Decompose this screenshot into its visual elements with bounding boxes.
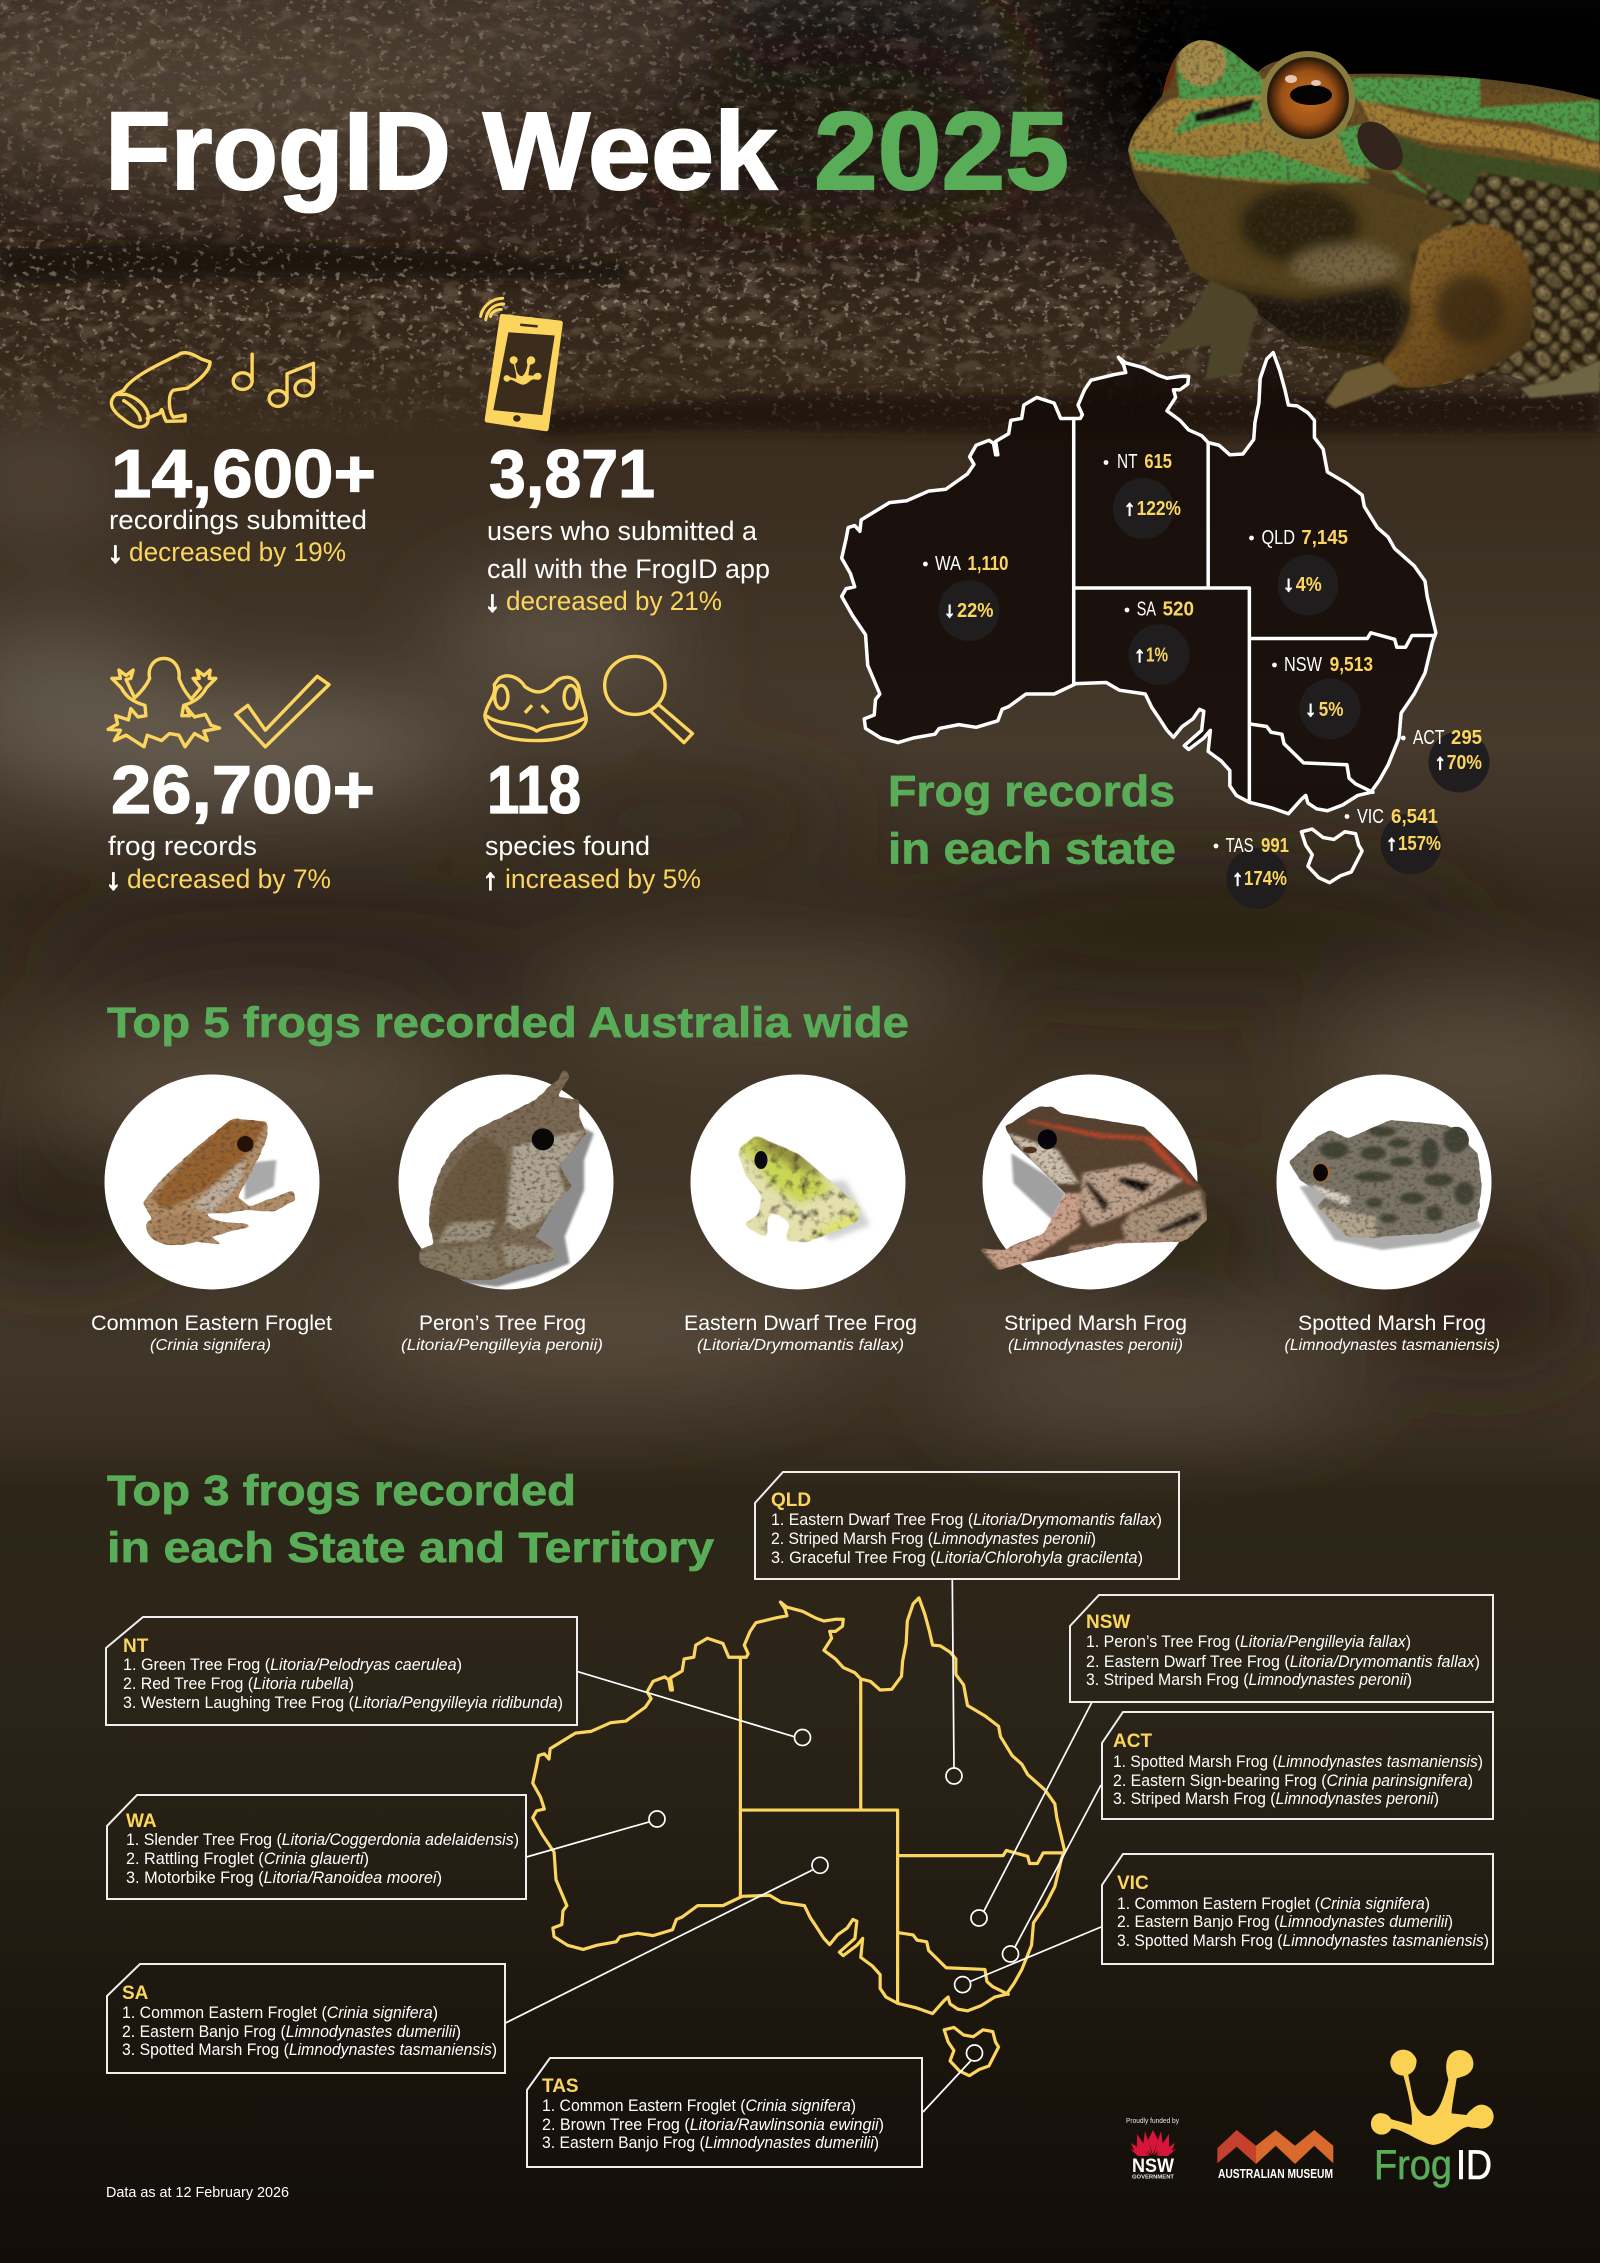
title xyxy=(105,90,1069,213)
stat: recordings submitted: ↓ xyxy=(108,537,123,569)
state label: TAS: TAS xyxy=(1226,835,1254,857)
state label: NSW: ↓ xyxy=(1305,698,1316,721)
callout: NT xyxy=(106,1617,577,1725)
callout: NSW: 3. Striped Marsh Frog (Limnodynastes peronii) xyxy=(1086,1670,1412,1689)
logo: NSW Government xyxy=(1126,2116,1179,2180)
state label: ACT: ACT xyxy=(1413,727,1444,749)
heading: top 3 frogs per state: in each State and Territory xyxy=(107,1524,714,1572)
logo: FrogID: ID xyxy=(1456,2141,1492,2188)
callout: NSW: NSW xyxy=(1086,1612,1130,1633)
state label: NT xyxy=(1104,451,1181,539)
logo: NSW Government: Proudly funded by xyxy=(1126,2116,1179,2125)
stat: species found: ↑ xyxy=(483,864,498,896)
state label: VIC: ↑ xyxy=(1386,832,1397,855)
stat: recordings submitted: decreased by 19% xyxy=(129,537,346,567)
callout: VIC: VIC xyxy=(1117,1873,1149,1894)
state label: WA: ↓ xyxy=(944,599,955,622)
state label: NSW xyxy=(1272,654,1373,740)
title: FrogID xyxy=(105,90,451,213)
frog names: Eastern Dwarf Tree Frog xyxy=(684,1312,917,1335)
logo: Australian Museum: AUSTRALIAN MUSEUM xyxy=(1218,2167,1333,2181)
frog card: Peron's Tree Frog xyxy=(398,1068,614,1290)
map: frog records per state xyxy=(842,353,1490,909)
state label: SA: 520 xyxy=(1163,598,1194,620)
heading: frog records in each state: in each state xyxy=(888,824,1176,874)
state label: NSW: 9,513 xyxy=(1330,654,1373,676)
callout: SA xyxy=(107,1964,505,2073)
logo: Australian Museum xyxy=(1217,2130,1333,2181)
stat: frog records: decreased by 7% xyxy=(127,864,331,894)
heading: frog records in each state xyxy=(888,767,1176,874)
callout: WA: 1. Slender Tree Frog (Litoria/Coggerdonia adelaidensis) xyxy=(126,1830,519,1849)
big number: 14,600+ xyxy=(111,436,376,512)
stat: app users xyxy=(481,298,770,618)
state label: TAS: 174% xyxy=(1244,868,1287,890)
callout: NT: 3. Western Laughing Tree Frog (Litoria/Pengyilleyia ridibunda) xyxy=(123,1693,563,1712)
state label: WA: 22% xyxy=(957,600,994,622)
frog card: Eastern Dwarf Tree Frog xyxy=(690,1074,906,1290)
state label: VIC: 6,541 xyxy=(1391,806,1438,828)
stat: species found: increased by 5% xyxy=(505,864,701,894)
frog names: Peron’s Tree Frog xyxy=(419,1312,586,1335)
callout: NT: NT xyxy=(123,1636,149,1657)
frog card: Common Eastern Froglet xyxy=(104,1074,320,1290)
callout: VIC xyxy=(1102,1854,1493,1964)
stat: recordings submitted: recordings submitted xyxy=(109,505,367,535)
callout: SA: SA xyxy=(122,1983,149,2004)
state label: SA xyxy=(1125,598,1194,685)
state label: TAS xyxy=(1214,835,1289,909)
callout: WA: WA xyxy=(126,1811,157,1832)
state label: ACT xyxy=(1401,727,1490,792)
callout: TAS: 1. Common Eastern Froglet (Crinia signifera) xyxy=(542,2096,856,2115)
frog names: Common Eastern Froglet xyxy=(91,1312,332,1335)
state label: SA: 1% xyxy=(1146,644,1168,666)
frog names: (Litoria/Drymomantis fallax) xyxy=(697,1337,904,1354)
state label: ACT: 70% xyxy=(1447,752,1482,774)
state label: TAS: 991 xyxy=(1261,835,1289,857)
stat: frog records xyxy=(106,658,375,896)
frog names xyxy=(91,1312,1500,1354)
callout: TAS xyxy=(527,2058,922,2167)
callout: WA: 3. Motorbike Frog (Litoria/Ranoidea moorei) xyxy=(126,1868,442,1887)
callout: ACT: ACT xyxy=(1113,1731,1152,1752)
map: Australia yellow outline xyxy=(533,1598,1065,2076)
state label: WA: WA xyxy=(935,553,962,575)
hero photo: green and golden bell frog xyxy=(1120,30,1600,410)
icon: frog calling with music notes xyxy=(111,353,313,427)
callout: TAS: TAS xyxy=(542,2076,579,2097)
state label: QLD: 4% xyxy=(1296,574,1322,596)
front leg xyxy=(1150,280,1258,380)
state label: ACT: ↑ xyxy=(1434,751,1446,774)
callout: QLD xyxy=(755,1472,1179,1579)
icon: frog face and magnifying glass xyxy=(485,656,692,743)
state label: TAS: ↑ xyxy=(1232,867,1243,890)
state label: QLD: ↓ xyxy=(1283,573,1294,596)
stat: frog records: ↓ xyxy=(106,864,121,896)
eardrum xyxy=(1348,113,1412,179)
heading: top 5 frogs: Top 5 frogs recorded Australia wide xyxy=(107,999,909,1047)
state label: NSW: 5% xyxy=(1319,699,1344,721)
state label: SA: SA xyxy=(1137,598,1156,620)
heading: top 3 frogs per state: Top 3 frogs recorded xyxy=(107,1467,576,1515)
leader lines and markers xyxy=(506,1580,1101,2112)
stat: species found: species found xyxy=(485,831,650,861)
callout: QLD: 2. Striped Marsh Frog (Limnodynastes peronii) xyxy=(771,1529,1096,1548)
heading: frog records in each state: Frog records xyxy=(888,767,1175,816)
callout: SA: 1. Common Eastern Froglet (Crinia signifera) xyxy=(122,2003,438,2022)
frog names: Striped Marsh Frog xyxy=(1004,1312,1187,1335)
state label: WA xyxy=(923,553,1008,641)
frog names: (Crinia signifera) xyxy=(150,1337,271,1354)
frog names: (Limnodynastes peronii) xyxy=(1008,1337,1183,1354)
stat: app users: users who submitted a xyxy=(487,516,758,546)
callout: ACT: 2. Eastern Sign-bearing Frog (Crinia parinsignifera) xyxy=(1113,1771,1473,1790)
frog names: (Litoria/Pengilleyia peronii) xyxy=(401,1337,603,1354)
callout: QLD: 1. Eastern Dwarf Tree Frog (Litoria/Drymomantis fallax) xyxy=(771,1510,1162,1529)
callout: WA xyxy=(107,1795,526,1899)
callout: NSW xyxy=(1070,1595,1493,1702)
logo: NSW Government: GOVERNMENT xyxy=(1132,2174,1174,2180)
callout: SA: 3. Spotted Marsh Frog (Limnodynastes tasmaniensis) xyxy=(122,2040,497,2059)
callout: ACT: 3. Striped Marsh Frog (Limnodynastes peronii) xyxy=(1113,1789,1439,1808)
state label: SA: ↑ xyxy=(1134,644,1145,666)
icon: frog from above with tick xyxy=(108,658,329,747)
stat: species found: 118 xyxy=(487,752,581,828)
frog card: Striped Marsh Frog xyxy=(979,1074,1206,1290)
stat: app users: decreased by 21% xyxy=(506,586,722,616)
rear foot xyxy=(1325,362,1400,408)
frog card: Spotted Marsh Frog xyxy=(1276,1074,1492,1290)
callout: QLD: 3. Graceful Tree Frog (Litoria/Chlorohyla gracilenta) xyxy=(771,1548,1143,1567)
state label: QLD xyxy=(1249,527,1348,616)
logo: NSW Government: NSW xyxy=(1132,2156,1174,2177)
state label: QLD: 7,145 xyxy=(1301,527,1348,549)
state label: VIC xyxy=(1345,806,1442,874)
state label: NT: ↑ xyxy=(1124,497,1135,520)
callout: NT: 1. Green Tree Frog (Litoria/Pelodryas caerulea) xyxy=(123,1655,462,1674)
frog names: Spotted Marsh Frog xyxy=(1298,1312,1486,1335)
frog names: (Limnodynastes tasmaniensis) xyxy=(1284,1337,1500,1354)
stat: species found xyxy=(483,656,701,896)
state label: NSW: NSW xyxy=(1284,654,1322,676)
callout: ACT xyxy=(1102,1712,1493,1819)
stat: frog records: frog records xyxy=(108,831,257,861)
callout: TAS: 2. Brown Tree Frog (Litoria/Rawlinsonia ewingii) xyxy=(542,2115,884,2134)
callout: SA: 2. Eastern Banjo Frog (Limnodynastes dumerilii) xyxy=(122,2022,461,2041)
heading: top 3 frogs per state xyxy=(107,1467,714,1572)
callout: TAS: 3. Eastern Banjo Frog (Limnodynastes dumerilii) xyxy=(542,2133,879,2152)
logo: FrogID: Frog xyxy=(1374,2141,1452,2188)
callout: QLD: QLD xyxy=(771,1490,811,1511)
callout: ACT: 1. Spotted Marsh Frog (Limnodynastes tasmaniensis) xyxy=(1113,1752,1483,1771)
state label: NT: 122% xyxy=(1137,498,1181,520)
stat: recordings submitted xyxy=(108,353,376,569)
stat: app users: ↓ xyxy=(485,586,500,618)
state label: VIC: 157% xyxy=(1398,833,1441,855)
state label: WA: 1,110 xyxy=(968,553,1008,575)
callout: NSW: 2. Eastern Dwarf Tree Frog (Litoria/Drymomantis fallax) xyxy=(1086,1652,1480,1671)
stat: app users: 3,871 xyxy=(489,436,655,512)
state label: NT: NT xyxy=(1117,451,1138,473)
state label: ACT: 295 xyxy=(1451,727,1482,749)
logo: FrogID xyxy=(1371,2050,1494,2188)
callout: WA: 2. Rattling Froglet (Crinia glauerti) xyxy=(126,1849,369,1868)
title: Week xyxy=(483,90,778,213)
eye xyxy=(1261,51,1355,145)
panel: top 5 frogs xyxy=(91,1068,1500,1354)
state label: VIC: VIC xyxy=(1357,806,1384,828)
state label: NT: 615 xyxy=(1144,451,1172,473)
icon: phone with FrogID logo xyxy=(481,298,560,429)
callout: VIC: 3. Spotted Marsh Frog (Limnodynastes tasmaniensis) xyxy=(1117,1931,1489,1950)
map outline xyxy=(842,353,1436,883)
callout: NT: 2. Red Tree Frog (Litoria rubella) xyxy=(123,1674,354,1693)
title: 2025 xyxy=(814,90,1069,213)
stat: app users: call with the FrogID app xyxy=(487,554,770,584)
state label: QLD: QLD xyxy=(1262,527,1295,549)
callout: VIC: 1. Common Eastern Froglet (Crinia signifera) xyxy=(1117,1894,1430,1913)
data date note: Data as at 12 February 2026 xyxy=(106,2185,289,2201)
stat: frog records: 26,700+ xyxy=(111,752,375,828)
callout: VIC: 2. Eastern Banjo Frog (Limnodynastes dumerilii) xyxy=(1117,1912,1453,1931)
callout: NSW: 1. Peron’s Tree Frog (Litoria/Pengilleyia fallax) xyxy=(1086,1632,1411,1651)
